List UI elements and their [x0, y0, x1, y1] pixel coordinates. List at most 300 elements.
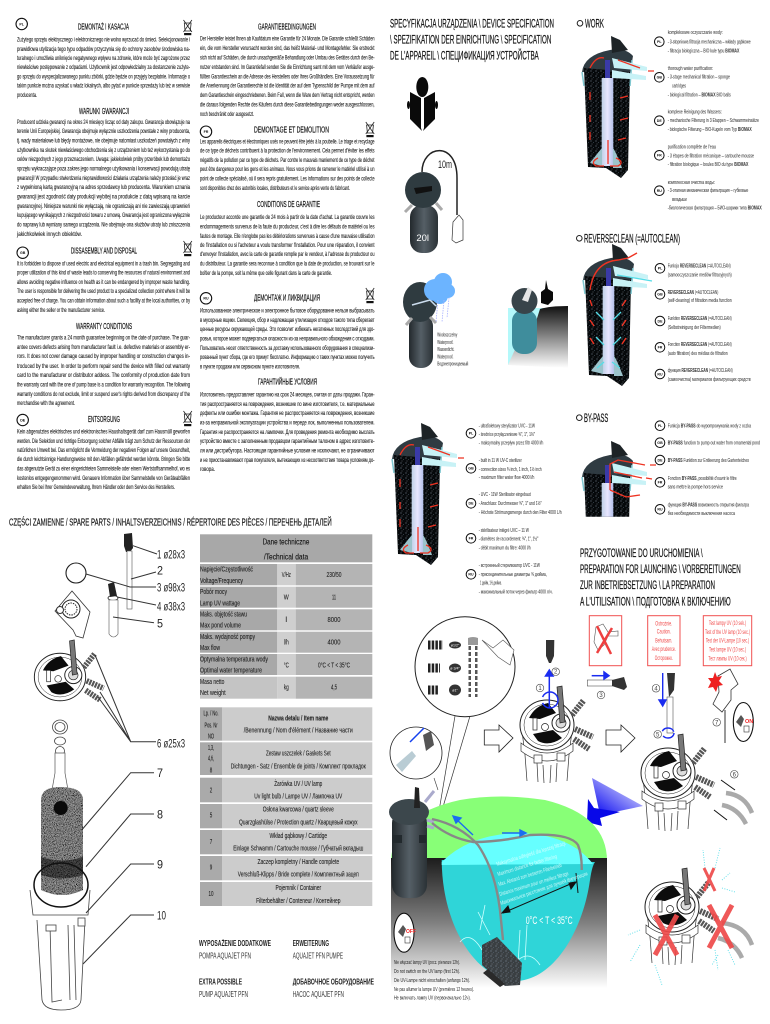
cloud: [424, 273, 455, 304]
text block: warranty: troduced by the user. In order to perform repair send the device with filled out warranty: [17, 363, 190, 370]
text block: Entsorgung: kostenlos entgegengenommen wird. Genauere Information über Sammelstelle von Geräteabfällen: [17, 475, 190, 482]
text block: демонтаж: ровья, которое может подвергаться опасности из-за неправильного обхождения с отходами.: [200, 334, 375, 342]
text: specification lines: - Anschluss: Durchmesser ¾", 1" und 1½": [479, 500, 542, 507]
text block: garantie: du distributeur. La garantie sera reconnue à condition que la date de production, se trouvant sur le: [200, 260, 375, 268]
text block: Garantie: füllten Garantieschein an die Adresse des Herstellers oder Ihres Großhändlers. Eine Voraussetzung für: [200, 74, 375, 80]
row labels: Lamp UV wattage: [200, 598, 240, 607]
position numbers: 2: [210, 785, 212, 794]
table cells: [200, 534, 372, 699]
badges: GB: [468, 467, 474, 471]
text: specification lines: - débit maximum du filtre: 4000 l/h: [479, 546, 531, 552]
callout: caution: Avec prudence.: [652, 647, 676, 653]
rain: [436, 298, 449, 322]
icon: thumbs up: [541, 280, 553, 305]
labels: part numbers: 2: [157, 563, 163, 577]
labels: part numbers: 6 ø25x3: [157, 736, 185, 750]
item names: Uv light bulb / Lampe UV / Лампочка UV: [254, 792, 342, 801]
text: reverse clean descriptions: (auto filtration) des médias de filtration: [668, 351, 728, 357]
text: reverse clean descriptions: (self-cleaning) of filtration media function: [668, 298, 732, 304]
callout: test UV lamp: [703, 616, 752, 666]
text block: disposal: go sprzętu do wyspecjalizowanego punktu zbiórki, gdzie będzie on przyjęty bezpłatnie. Informacje o: [17, 74, 190, 80]
switch: OFF: [394, 913, 416, 952]
text block: optional equipment: НАСОС AQUAJET PFN: [293, 990, 344, 999]
units and values: 8000: [328, 615, 340, 624]
rotated max distance text: Maksymalna odległość dla lepszej filtracji: [496, 841, 566, 868]
illustration: incorrect installation warnings: [628, 848, 752, 985]
text block: disposal: The user is responsible for delivering the used product to a specialized collection point where it will be: [17, 288, 190, 295]
text block: warranty: the warranty card with the one of pump base is a condition for warranty recognition. The following: [17, 382, 190, 388]
badges: GB: [657, 293, 663, 297]
badges: [654, 37, 664, 196]
text block: warranty: gwarancji! W przypadku stwierdzenia nieprawidłowości działania urządzenia należy przesłać je wraz: [17, 175, 190, 182]
callout: caution: [648, 616, 680, 666]
step numbers: [536, 668, 605, 699]
units and values: W: [284, 593, 289, 602]
item names: Nazwa detalu / Item name: [268, 714, 328, 723]
arrow: step 2 to 3: [606, 725, 635, 752]
text block: optional equipment: ДОБАВОЧНОЕ ОБОРУДОВАНИЕ: [293, 977, 374, 986]
text block: гарантия: Гарантия не распространяется на лампочки. Для проведения ремонта необходимо выслать: [200, 428, 375, 436]
panel: technical data table: [200, 534, 372, 699]
text block: disposal: accepted free of charge. You can obtain information about such a facility at the local authorities, or by: [17, 298, 190, 304]
text block: Garantie: die Anerkennung der Garantierechte ist die Identität der auf dem Typenschild der Pumpe mit dem auf: [200, 82, 375, 90]
illustration: filter with 10 m cable: [405, 151, 463, 253]
slope: [508, 306, 568, 368]
text: work descriptions: комплексная очистка воды:: [668, 180, 715, 186]
text block: warranty: jakichkolwiek innych obiektów.: [16, 231, 82, 238]
position numbers: 9: [210, 863, 212, 872]
text block: warranty: użytkownika na skutek niewłaściwego obchodzenia się z urządzeniem lub też wykorzystania go do: [17, 147, 190, 154]
rotated max distance text: [496, 841, 589, 907]
leader lines: [82, 546, 157, 964]
text block: disposal: allows avoiding negative influence on health as it can be endangered by improper waste handling.: [17, 279, 190, 286]
filter lid and body: [641, 734, 714, 831]
illustration: UV lamp test with adapter: [708, 669, 753, 743]
text: reverse clean descriptions: Funktion REVERSECLEAN (=AUTOCLEAN): [668, 316, 732, 322]
text block: Garantie: ein, die vom Hersteller verursacht worden sind, das heißt Material- und Montagefehler. Sie erstreckt: [200, 45, 375, 52]
position numbers: Lp. / No.: [204, 709, 218, 718]
panel: by-pass section: BY-PASS: [584, 411, 608, 425]
text block: optional equipment: [199, 939, 374, 999]
text: reverse clean descriptions: Funkcja REVERSECLEAN (=AUTOCLEAN): [668, 264, 731, 270]
text: reverse clean descriptions: (samooczyszczanie mediów filtracyjnych): [668, 273, 732, 279]
badges: DE: [468, 502, 474, 506]
units and values: 4,5: [331, 683, 337, 692]
heading: spare parts: CZĘŚCI ZAMIENNE / SPARE PARTS / INHALTSVERZEICHNIS / RÉPERTOIRE DES PIÈCES / ПЕРЕЧЕНЬ ДЕТАЛЕЙ: [9, 516, 332, 528]
adapter: [713, 669, 738, 712]
text: work descriptions: [668, 30, 762, 212]
units and values: [282, 570, 350, 692]
labels: part numbers: 10: [157, 908, 166, 922]
labels: hose diameters: ø1/2": [451, 644, 460, 648]
text block: warranty: gwarancyjnej. Niniejsze warunki nie wyłączają, nie ograniczają ani nie zawieszają uprawnień: [17, 203, 190, 210]
heading: device specification: [390, 16, 554, 62]
blue arrows: [542, 670, 609, 708]
step numbers: [652, 684, 738, 778]
text block: Garantie: nutzer entstanden sind. Im Garantiefall senden Sie die Einrichtung samt mit dem vom Verkäufer ausge-: [200, 64, 374, 71]
position numbers: Pos. Nr: [204, 720, 218, 729]
cable: [422, 151, 457, 215]
illustration: filter cross-section with red flow arrows: [582, 36, 654, 178]
label: 10m: 10m: [438, 159, 452, 171]
text block: демонтаж: в мусорные ящики. Селекция, сбор и надлежащая утилизация отходов такого типа сберегает: [200, 316, 374, 324]
text block: Garantie: noch beschränkt oder ausgesetzt.: [200, 111, 254, 118]
units and values: l/h: [284, 638, 289, 647]
text block: warranty: do naprawy lub wymiany samego urządzenia. Nie obejmuje ona służbów utraty lub zniszczenia: [17, 222, 190, 228]
row labels: Maks. wydajność pompy: [200, 632, 255, 641]
row labels: Maks. objętość stawu: [200, 610, 247, 619]
icon: crossed bin: [366, 122, 374, 137]
text: specification lines: - ultrafioletowy sterylizator UVC - 11W: [479, 424, 535, 430]
heading: BY-PASS: [576, 411, 608, 425]
part: quartz sleeve: [108, 582, 118, 637]
text block: Garantie: [200, 36, 375, 118]
heading: DEMONTAGE ET DEMOLITION: DEMONTAGE ET DEMOLITION: [254, 125, 329, 134]
text block: garantie: endommagements survenus de la faute du producteur, c'est à dire les défauts de matériel ou les: [200, 224, 375, 230]
filter lid and body: [520, 686, 593, 783]
text block: warranty: warranty conditions do not exclude, limit or suspend user's rights derived from discrepancy of the: [16, 391, 190, 398]
text: specification lines: [479, 424, 562, 596]
heading: device specification: SPECYFIKACJA URZĄDZENIA \ DEVICE SPECIFICATION: [390, 16, 554, 30]
row labels: Masa netto: [200, 677, 224, 686]
panel: by-pass section: [576, 413, 760, 517]
text block: disposal: producenta.: [17, 92, 37, 99]
text block: démontage: Les appareils électriques et électroniques usés ne peuvent être jetés à la poubelle. Le triage et recyclage: [200, 138, 375, 146]
row labels: Max flow: [200, 643, 221, 652]
item names: Quarzglashülse / Protection quartz / Кварцевый кожух: [239, 817, 358, 826]
pond surface: [442, 833, 593, 865]
pond plants: [460, 905, 540, 965]
item names: Einlage Schwamm / Cartouche mousse / Губчатый вкладыш: [233, 844, 363, 853]
flow arrows: [453, 816, 526, 836]
badges: PL: [469, 432, 474, 436]
text block: Entsorgung: das abgenutzte Gerät zu einer eingerichteten Sammelstelle oder einem Wertstoffsammelhof, wo es: [17, 466, 190, 472]
text block: демонтаж: [200, 306, 375, 370]
text block: garantie: de l'installation ou si l'acheteur a voulu transformer l'installation. Pour une réparation, il convient: [200, 242, 375, 249]
text block: warranty: antee covers defects arising from manufacturer fault i.e. defective materials or assembly er-: [17, 344, 190, 351]
text block: Entsorgung: werden. Die Selektion und richtige Entsorgung solcher Abfälle trägt zum Schutz der Ressourcen der: [16, 438, 190, 445]
text block: гарантия: из-за неправильной эксплуатации устройства и переде лок, выполненных пользователем.: [200, 418, 375, 426]
heading: WARUNKI GWARANCJI: WARUNKI GWARANCJI: [79, 107, 129, 116]
illustration: large bubble with adapters: [415, 617, 515, 817]
text: specification lines: - stérilisateur intégré UVC – 11 W: [479, 528, 529, 534]
labels: part numbers: 1 ø28x3: [157, 547, 185, 561]
text: specification lines: - diamètres de raccordement: ¾", 1", 1½": [479, 536, 538, 543]
labels: hose diameters: ø 3/4": [450, 666, 460, 670]
rotated max distance text: Maximum distance for better filtering: [497, 854, 558, 878]
row labels: Napięcie/Częstotliwość: [200, 565, 253, 574]
panel: German disposal: [16, 411, 192, 491]
text block: disposal: takim punkcie można uzyskać u władz lokalnych, albo pytać w punkcie sprzedaży lub też w serwisie: [17, 82, 190, 90]
illustration: waterproof filter in rain: [403, 273, 468, 368]
heading: DISSASEMBLY AND DISPOSAL: DISSASEMBLY AND DISPOSAL: [71, 247, 137, 256]
step numbers: 1: [538, 686, 542, 692]
rotated max distance text: Distance maximum pour un meilleur filtrage: [499, 871, 569, 898]
heading: REVERSECLEAN: REVERSECLEAN (=AUTOCLEAN): [584, 232, 680, 246]
icon: crossed bin: [366, 288, 374, 303]
badges: RU: [657, 189, 662, 193]
item names: Pojemnik / Container: [275, 883, 322, 892]
text block: гарантия: говора.: [200, 466, 215, 473]
badge: FR: FR: [204, 130, 209, 134]
panel: reverse clean section: [576, 232, 751, 386]
text: waterproof: Waterproof.: [437, 354, 454, 360]
position numbers: 5: [210, 810, 212, 819]
callout: caution: Caution.: [657, 629, 671, 635]
illustration: cross-section with cyan and red flow: [583, 244, 652, 386]
panel: German warranty: [200, 23, 375, 118]
adapters: [428, 645, 443, 690]
text: specification lines: - максимальный поток через фильтр 4000 л/ч.: [479, 589, 553, 596]
text: work descriptions: - biological filtration – BIOMAX BIO balls: [668, 93, 731, 99]
text: waterproof: Wodoszczelny: [437, 333, 457, 339]
position numbers: 8: [210, 766, 212, 775]
heading: GARANTIEBEDINGUNGEN: GARANTIEBEDINGUNGEN: [258, 23, 316, 32]
part: foam cartridge: [41, 787, 83, 895]
warning text: [394, 960, 474, 1002]
labels: part numbers: 3 ø98x3: [157, 580, 185, 594]
badges: [466, 428, 476, 579]
text block: disposal: asking either the seller or the manufacturer service.: [17, 307, 105, 314]
heading: device specification: DE L'APPAREIL \ СПЕЦИФИКАЦИЯ УСТРОЙСТВА: [390, 48, 539, 62]
text block: Entsorgung: die durch leichtsinnige Handlungsweise mit den Abfällen gefährdet werden könnte. Bringen Sie bitte: [17, 456, 190, 463]
text: work descriptions: вкладыши: [672, 197, 687, 203]
heading: preparation for launching: [580, 546, 741, 608]
badges: PL: [658, 267, 663, 271]
text: specification lines: - maksymalny przepływ przez filtr 4000 l/h: [479, 441, 543, 447]
text block: гарантия: [200, 392, 375, 473]
text block: warranty: z wypełnioną kartą gwarancyjną na adres sprzedawcy lub producenta. Warunkiem uznania: [17, 184, 190, 191]
badges: RU: [468, 573, 474, 577]
position numbers: 1,3,: [208, 743, 214, 752]
text block: disposal: [17, 36, 190, 99]
labels: part numbers: [157, 547, 185, 922]
text block: garantie: boîtier de la pompe, soit la même que celle figurant dans la carte de garantie.: [200, 270, 332, 277]
item names: [231, 714, 366, 905]
rotated max distance text: Максимальное расстояние для лучшей фильтрации: [499, 870, 589, 907]
row labels: Net weight: [200, 688, 226, 697]
text block: optional equipment: PUMP AQUAJET PFN: [199, 990, 248, 999]
text: by-pass descriptions: Fonction BY-PASS, possibilité d'ouvrir le filtre: [668, 476, 737, 482]
part: filter lid: [34, 640, 104, 701]
text: reverse clean descriptions: функция REVERSECLEAN (=AUTOCLEAN): [668, 368, 733, 374]
plug and tube: [667, 673, 675, 733]
warning text: Nie włączać lampy UV (pocz. pierwsze 12h).: [394, 960, 460, 966]
text block: warranty: terenie Unii Europejskiej. Gwarancja obejmuje wyłącznie uszkodzenia powstałe z winy producenta,: [17, 128, 190, 135]
text block: disposal: prawidłowa utylizacja tego typu odpadów przyczynia się do ochrony zasobów środowiska na-: [17, 46, 190, 53]
pond water: [442, 860, 595, 981]
illustration: submerged filter with thumbs up: [508, 280, 568, 368]
units and values: kg: [284, 683, 289, 692]
text block: démontage: [200, 138, 375, 192]
text block: гарантия: тия распространяется на повреждения, возникшие по вине изготовителя, т.е. материальные: [200, 401, 375, 408]
illustration: step 3 assembled filter with hoses: [641, 673, 752, 831]
hose fitting: [468, 637, 478, 697]
heading: device specification: \ SPEZIFIKATION DER EINRICHTUNG \ SPECIFICATION: [390, 32, 551, 46]
pump: [482, 937, 522, 987]
text: waterproof: Waterproof.: [437, 340, 454, 346]
text block: гарантия: дефекты или ошибки монтажа. Гарантия не распространяется на повреждения, возникшие: [200, 409, 375, 417]
icon: crossed bin: [184, 411, 192, 426]
badges: FR: [657, 154, 662, 158]
warning text: Do not switch on the UV lamp (first 12h).: [394, 969, 460, 975]
badge: GB: [17, 247, 28, 258]
text: work descriptions: - 3-stage mechanical filtration – sponge: [668, 75, 730, 81]
leak sprays: [628, 848, 735, 985]
badges: GB: [657, 441, 663, 445]
position numbers: 4,6,: [208, 754, 214, 763]
text: work descriptions: kompleksowe oczyszczanie wody:: [668, 30, 723, 36]
removed plug and tube: [546, 640, 627, 690]
position numbers: NO: [208, 731, 214, 740]
units and values: °C: [284, 660, 289, 669]
labels: part numbers: 5: [157, 616, 163, 630]
text block: garantie: Le producteur accorde une garantie de 24 mois à partir de la date d'achat. La garantie couvre les: [200, 214, 375, 221]
labels: part numbers: 4 ø38x3: [157, 599, 185, 613]
filter body: [405, 172, 442, 253]
text block: Entsorgung: natürlichen Umwelt bei. Das ermöglicht die Vermeidung der negativen Folgen auf unsere Gesundheit,: [17, 447, 190, 454]
text block: демонтаж: ценные ресурсы окружающей среды. Это позволит избежать негативных последствий для здо-: [200, 325, 374, 333]
text: waterproof: Wasserdicht.: [437, 347, 455, 353]
row labels: Optymalna temperatura wody: [200, 654, 268, 663]
text: by-pass descriptions: без необходимости выключения насоса: [668, 511, 736, 517]
heading: ДЕМОНТАЖ И ЛИКВИДАЦИЯ: ДЕМОНТАЖ И ЛИКВИДАЦИЯ: [254, 294, 320, 303]
callout: caution: Ostrożnie.: [655, 621, 673, 627]
transformer box: [452, 215, 463, 243]
text block: гарантия: устройство вместе с заполненным продавцом гарантийным талоном в адрес изготовите-: [200, 437, 374, 445]
text block: демонтаж: Пользователь несет ответственность за доставку использованного оборудования в специализи-: [200, 344, 374, 352]
heading: WARRANTY CONDITIONS: WARRANTY CONDITIONS: [76, 322, 132, 331]
text: specification lines: - UVC - 11W Sterilisator eingebaut: [479, 492, 531, 498]
text block: warranty: merchandise with the agreement.: [17, 400, 75, 407]
text block: disposal: [17, 260, 190, 314]
red flash: [708, 672, 723, 692]
badges: DE: [657, 119, 662, 123]
text: reverse clean descriptions: REVERSECLEAN (=AUTOCLEAN): [668, 290, 718, 296]
illustration: cross-section with by-pass flow: [581, 441, 656, 517]
text: by-pass descriptions: sans mettre la pompe hors service: [668, 485, 723, 491]
labels: part numbers: 7: [157, 766, 163, 780]
text: specification lines: - średnice przyłączeniowe ¾", 1", 1½": [479, 431, 535, 438]
filter on bank: [389, 787, 434, 898]
text block: гарантия: Изготовитель предоставляет гарантию на срок 24 месяцев, считая от даты продажи. Гаран-: [200, 392, 374, 398]
step numbers: 6: [733, 772, 737, 778]
badge: PL: PL: [19, 22, 25, 26]
step numbers: 5: [656, 732, 660, 738]
row labels: Voltage/Frequency: [200, 576, 243, 585]
labels: part numbers: 8: [157, 807, 163, 821]
text block: Garantie: Der Hersteller leistet Ihnen ab Kaufdatum eine Garantie für 24 Monate. Die Garantie schließt Schäden: [200, 36, 375, 42]
item names: Żarówka UV / UV lamp: [274, 779, 322, 788]
warning text: Не включать лампу UV (первоначально 12ч).: [394, 996, 471, 1002]
heading: ENTSORGUNG: ENTSORGUNG: [88, 415, 120, 424]
arrow: blue fan pointing to pond: [587, 778, 643, 826]
badges: [655, 421, 665, 514]
text: specification lines: - built in 11 W UV-C sterilizer: [479, 458, 522, 464]
chart: exploded parts diagram: [30, 533, 185, 1010]
text block: disposal: It is forbidden to dispose of used electric and electrical equipment in a trash bin. Segregating and: [17, 260, 190, 268]
table header: Dane techniczne: [263, 537, 310, 547]
item names: Filterbehälter / Conteneur / Контейнер: [256, 896, 340, 905]
badges: DE: [658, 458, 663, 462]
text: work descriptions: - filtration biologique – boules BIO du type BIOMAX: [668, 162, 748, 168]
text block: Entsorgung: Kein abgenutztes elektrisches und elektronisches Haushaltsgerät darf zum Hausmüll geworfen: [17, 428, 190, 436]
heading: WORK: [577, 16, 604, 30]
badge: GB: GB: [20, 251, 26, 255]
text block: warranty: Producent udziela gwarancji na okres 24 miesięcy licząc od daty zakupu. Gwarancja obowiązuje na: [17, 119, 190, 126]
hand with knife: [482, 640, 514, 665]
text block: garantie: d'envoyer l'installation, avec la carte de garantie remplie par le vendeur, à l'adresse du producteur ou: [200, 251, 375, 258]
icon: person reading manual: [407, 77, 438, 131]
step number: 7: [715, 720, 719, 726]
text block: демонтаж: Использованное электрическое и электронное бытовое оборудование нельзя выбрасывать: [200, 306, 375, 314]
badges: DE: [658, 319, 663, 323]
text block: warranty: celów niezgodnych z jego przeznaczeniem. Uwaga: jakiekolwiek próby przeróbek lub demontażu: [17, 156, 190, 163]
text: specification lines: - connection sizes ¾ inch, 1 inch, 1½ inch: [479, 466, 542, 473]
units and values: 0°C < T < 35°C: [318, 660, 350, 669]
panel: work section: [577, 16, 762, 212]
badges: FR: [658, 346, 663, 350]
text: work descriptions: purification complète de l'eau: [668, 145, 716, 151]
text block: démontage: peut être dangereux pour les gens et les animaux. Nous vous prions de ramener le matériel utilisé à un: [200, 166, 375, 173]
item names: Dichtungen - Satz / Ensemble de joints / Комплект прокладок: [231, 761, 366, 770]
text block: démontage: point de collecte spécialisé, où il sera repris gratuitement. Les informations sur des points de collecte: [200, 176, 375, 182]
part: container: [30, 890, 90, 1010]
table cells: [200, 707, 372, 906]
text block: гарантия: и не приостанавливают прав покупателя, вытекающих из несоответствия товара условиям до-: [200, 457, 374, 464]
badges: [655, 264, 665, 379]
filter body: [403, 282, 437, 368]
switch: ON: ON: [745, 719, 753, 725]
part: large o-ring: [66, 563, 86, 583]
warning text: Ne pas allumer la lampe UV (premières 12 heures).: [394, 987, 474, 993]
text block: optional equipment: WYPOSAŻENIE DODATKOWE: [199, 939, 271, 948]
ground: [391, 858, 607, 988]
heading: DEMONTAŻ I KASACJA: DEMONTAŻ I KASACJA: [78, 23, 129, 32]
text: specification lines: - Höchste Strömungsmenge durch den Filter 4000 L/h: [479, 510, 562, 516]
units and values: 11: [332, 593, 336, 602]
distance arrow: [502, 873, 578, 913]
text: waterproof: [437, 333, 468, 368]
badges: RU: [657, 372, 663, 376]
icon: crossed bin: [184, 241, 192, 256]
illustration: step 2 opening the filter: [520, 640, 627, 783]
illustration: small bubble with hose detail: [390, 727, 442, 790]
row labels: Optimal water temperature: [200, 666, 262, 675]
item names: Verschluß-Klipps / Bride complete / Комплектный зацеп: [238, 870, 359, 879]
badges: GB: [657, 76, 662, 80]
blue arrows: [659, 673, 674, 738]
text block: disposal: proper utilization of this kind of waste leads to conserving the resources of natural environment and: [17, 270, 190, 276]
badge: PL: [16, 18, 27, 30]
table header: /Technical data: [264, 552, 308, 562]
text block: демонтаж: рованный пункт сбора, где его примут бесплатно. Информацию о таких пунктах можно получить: [200, 353, 375, 361]
text: by-pass descriptions: [668, 424, 760, 517]
text: reverse clean descriptions: Fonction REVERSECLEAN (=AUTOCLEAN): [668, 342, 732, 348]
badge: DE: DE: [20, 418, 26, 422]
heading: ГАРАНТИЙНЫЕ УСЛОВИЯ: ГАРАНТИЙНЫЕ УСЛОВИЯ: [258, 378, 317, 387]
text block: démontage: sont disponibles chez des autorités locales, distributeurs et le service après vente du fabricant.: [200, 185, 350, 192]
hoses: [718, 923, 752, 958]
text: specification lines: - встроенный стерилизатор UVC - 11W: [479, 562, 540, 569]
step numbers: 4: [654, 686, 658, 692]
item names: Zaczep kompletny / Handle complete: [257, 857, 339, 866]
panel: English disposal and warranty: [16, 241, 192, 407]
text block: warranty: [16, 119, 190, 238]
text: work descriptions: - filtracja biologiczna – BIO kule typu BIOMAX: [668, 49, 739, 55]
text block: warranty: kupującego wynikających z niezgodności towaru z umową. Gwarancja jest ograniczona wyłącznie: [17, 212, 190, 219]
temperature label: 0°C < T < 35°C: [526, 915, 573, 927]
